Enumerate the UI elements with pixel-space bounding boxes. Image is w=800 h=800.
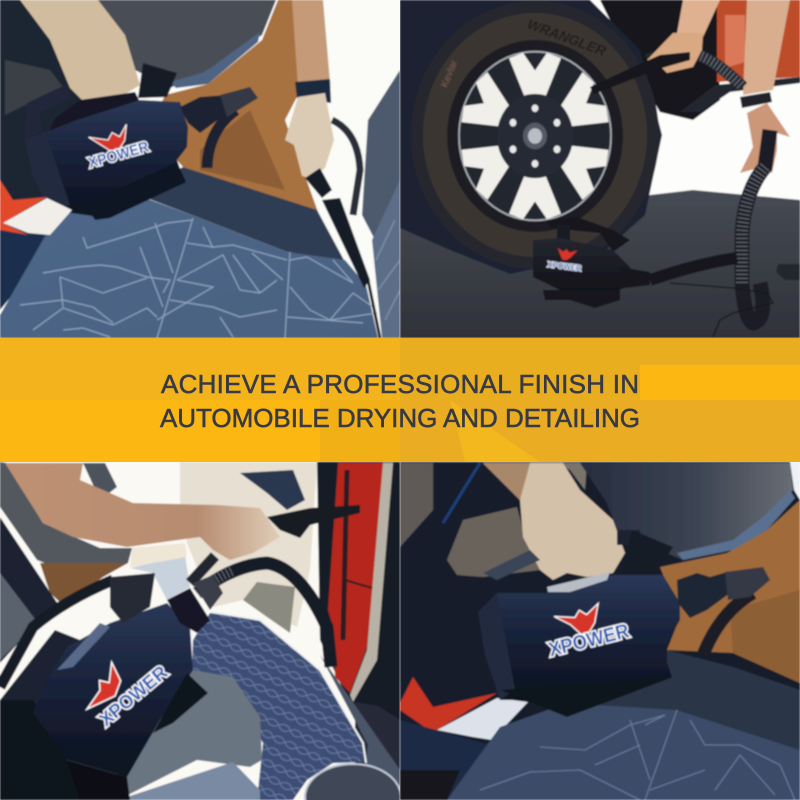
trousers bbox=[660, 500, 800, 683]
panel: door jamb detailing, bottom left photo bbox=[0, 462, 401, 800]
red door sill bbox=[400, 677, 497, 743]
trousers bbox=[40, 563, 128, 605]
hand holding nozzle bbox=[647, 33, 703, 73]
seat stitching bbox=[480, 710, 795, 800]
seat backrest bbox=[0, 517, 60, 663]
seat bolster bbox=[133, 167, 345, 262]
dark car interior bbox=[0, 0, 82, 226]
shirt bbox=[580, 463, 793, 560]
logo: XPOWER bbox=[86, 138, 151, 172]
seat stitching pattern bbox=[20, 218, 377, 338]
logo: XPOWER bbox=[546, 620, 632, 661]
seat cushion bbox=[447, 703, 800, 800]
main hose arch bbox=[197, 563, 331, 667]
tyre sidewall lettering: WRANGLER bbox=[525, 16, 609, 59]
logo bbox=[74, 639, 172, 733]
banner heading: AUTOMOBILE DRYING AND DETAILING bbox=[160, 403, 640, 433]
tyre: Kevlar bbox=[439, 58, 460, 89]
hose connecting blower bbox=[207, 110, 236, 168]
blower: hand-held dryer bbox=[478, 530, 770, 717]
logo: XPOWER bbox=[547, 260, 582, 273]
hose behind blower bbox=[703, 593, 753, 655]
right arm and hand bbox=[285, 0, 334, 178]
car door panel bbox=[180, 462, 317, 627]
arm and hand bbox=[483, 463, 625, 580]
pale floor seen through door bbox=[130, 555, 190, 600]
seat side bolster bbox=[320, 655, 400, 800]
banner heading: ACHIEVE A PROFESSIONAL FINISH IN bbox=[161, 369, 639, 399]
vacuum nozzle in hand bbox=[305, 168, 380, 338]
logo bbox=[81, 120, 151, 172]
navy lower panel bbox=[400, 720, 490, 800]
car interior tan panel bbox=[400, 463, 433, 547]
seat bolster bbox=[540, 650, 800, 750]
small hose to hand bbox=[190, 556, 215, 583]
cup holder bbox=[305, 764, 401, 800]
cable bbox=[670, 283, 773, 337]
alloy wheel bbox=[457, 52, 613, 220]
logo bbox=[541, 598, 632, 661]
trousers bbox=[150, 0, 318, 212]
grey cushion bbox=[100, 670, 262, 800]
yellow banner bbox=[0, 338, 800, 462]
red door jamb bbox=[328, 463, 383, 693]
object at right edge bbox=[776, 264, 800, 280]
lower hand bbox=[740, 103, 790, 173]
tyre bbox=[400, 0, 662, 274]
seat bbox=[192, 613, 367, 800]
arm bbox=[5, 463, 280, 560]
seat back bbox=[362, 70, 400, 240]
left arm and hand bbox=[20, 0, 140, 108]
asphalt ground bbox=[400, 190, 800, 338]
back hose loop bbox=[332, 120, 360, 215]
blower: hand-held dryer bbox=[25, 63, 258, 220]
shirt and torso bbox=[0, 462, 132, 572]
panel: blower close-up, bottom right photo bbox=[400, 462, 800, 800]
door frame and sill bbox=[317, 462, 400, 800]
panel: seat detailing, top left photo bbox=[0, 0, 400, 338]
logo: XPOWER bbox=[96, 662, 172, 731]
shirt bbox=[98, 0, 276, 88]
red and white door sill bbox=[0, 180, 47, 235]
truck chassis bbox=[600, 0, 720, 120]
centre console bbox=[118, 762, 260, 800]
hose, upright coil bbox=[647, 53, 770, 323]
handheld nozzle bbox=[267, 505, 360, 538]
blower on the ground bbox=[533, 217, 650, 308]
seat cushion bbox=[0, 198, 378, 338]
blower bbox=[0, 573, 223, 800]
arms bbox=[677, 0, 720, 37]
panel: wheel drying, top right photo bbox=[400, 0, 800, 338]
banner heading bbox=[160, 369, 640, 433]
watch bbox=[740, 92, 772, 108]
nozzle bbox=[590, 52, 690, 94]
